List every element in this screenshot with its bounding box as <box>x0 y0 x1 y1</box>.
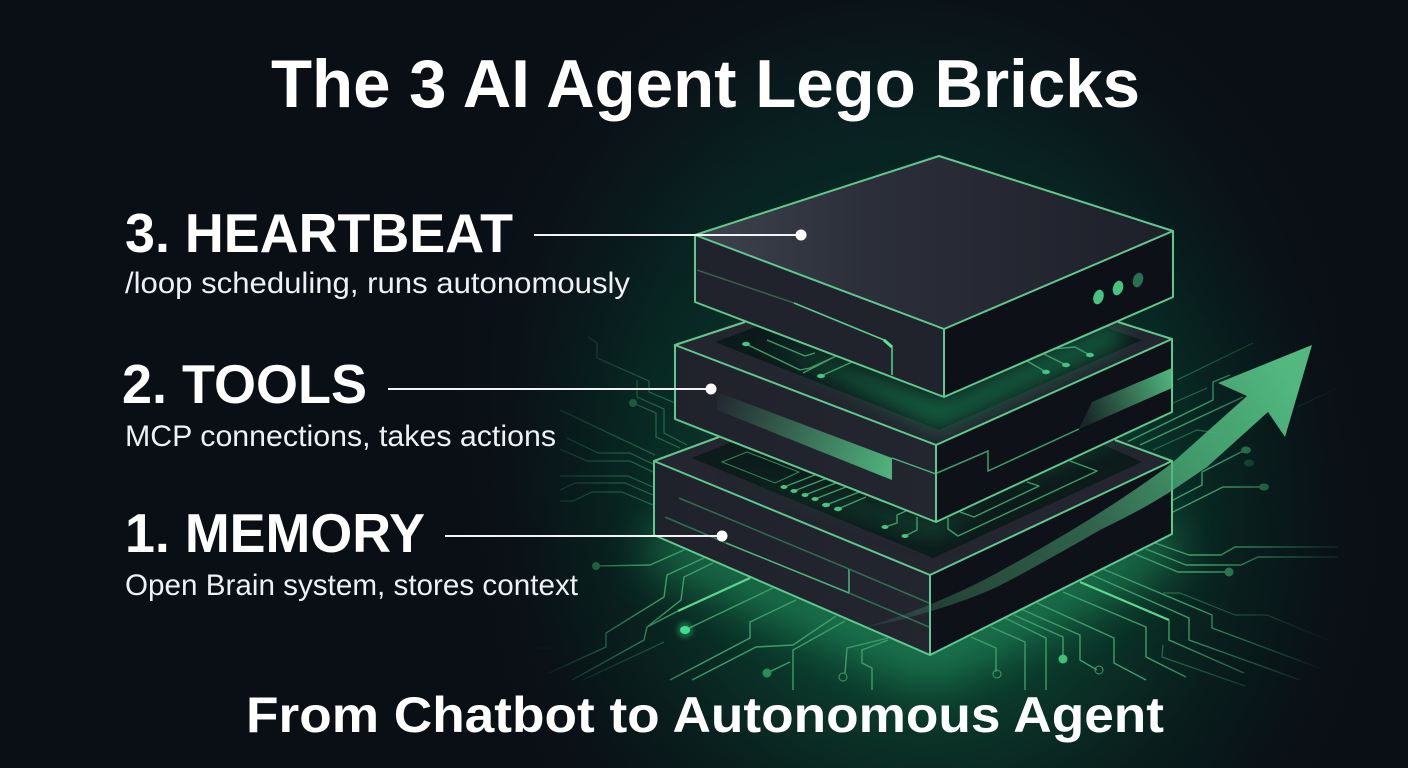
leader line <box>388 384 716 394</box>
top face <box>695 156 1173 329</box>
traces: upper left <box>560 337 687 505</box>
label 1: memory <box>125 502 728 602</box>
left face <box>654 461 930 655</box>
right face notch <box>937 429 1079 473</box>
growth arrow <box>852 345 1312 630</box>
top face <box>675 250 1172 445</box>
heading: 2. TOOLS <box>122 353 367 415</box>
label 3: heartbeat <box>125 202 806 300</box>
status lights <box>1091 271 1145 306</box>
face panel lines <box>665 498 929 627</box>
footer tagline: From Chatbot to Autonomous Agent <box>246 687 1164 743</box>
outline <box>695 156 1173 397</box>
brick 2: tools <box>674 320 1173 523</box>
leader line <box>445 530 728 542</box>
description: Open Brain system, stores context <box>125 569 579 602</box>
heading: 3. HEARTBEAT <box>125 202 513 264</box>
traces: lower left <box>474 550 845 690</box>
description: MCP connections, takes actions <box>125 420 556 453</box>
label 2: tools <box>122 353 716 453</box>
brick 3: heartbeat <box>695 156 1173 397</box>
left face <box>675 345 936 522</box>
description: /loop scheduling, runs autonomously <box>125 267 630 300</box>
right face <box>936 339 1172 522</box>
right face <box>930 461 1172 655</box>
heading: 1. MEMORY <box>125 502 425 564</box>
circuit traces <box>474 337 1340 690</box>
brick 1: memory <box>653 436 1173 656</box>
face line <box>697 270 892 375</box>
right face <box>944 231 1173 397</box>
traces: lower right <box>1063 543 1338 686</box>
recess with circuit <box>692 438 1142 558</box>
outline <box>654 437 1172 655</box>
traces: upper right <box>1127 343 1340 512</box>
recess with circuit <box>716 321 1142 438</box>
left face <box>695 235 944 397</box>
right green band <box>1079 368 1172 429</box>
traces: bottom <box>762 603 1146 690</box>
title: The 3 AI Agent Lego Bricks <box>271 46 1140 122</box>
left face line <box>892 458 936 474</box>
top face <box>654 350 1172 575</box>
outline <box>675 322 1172 522</box>
left green band <box>717 392 892 480</box>
leader line <box>534 230 806 240</box>
